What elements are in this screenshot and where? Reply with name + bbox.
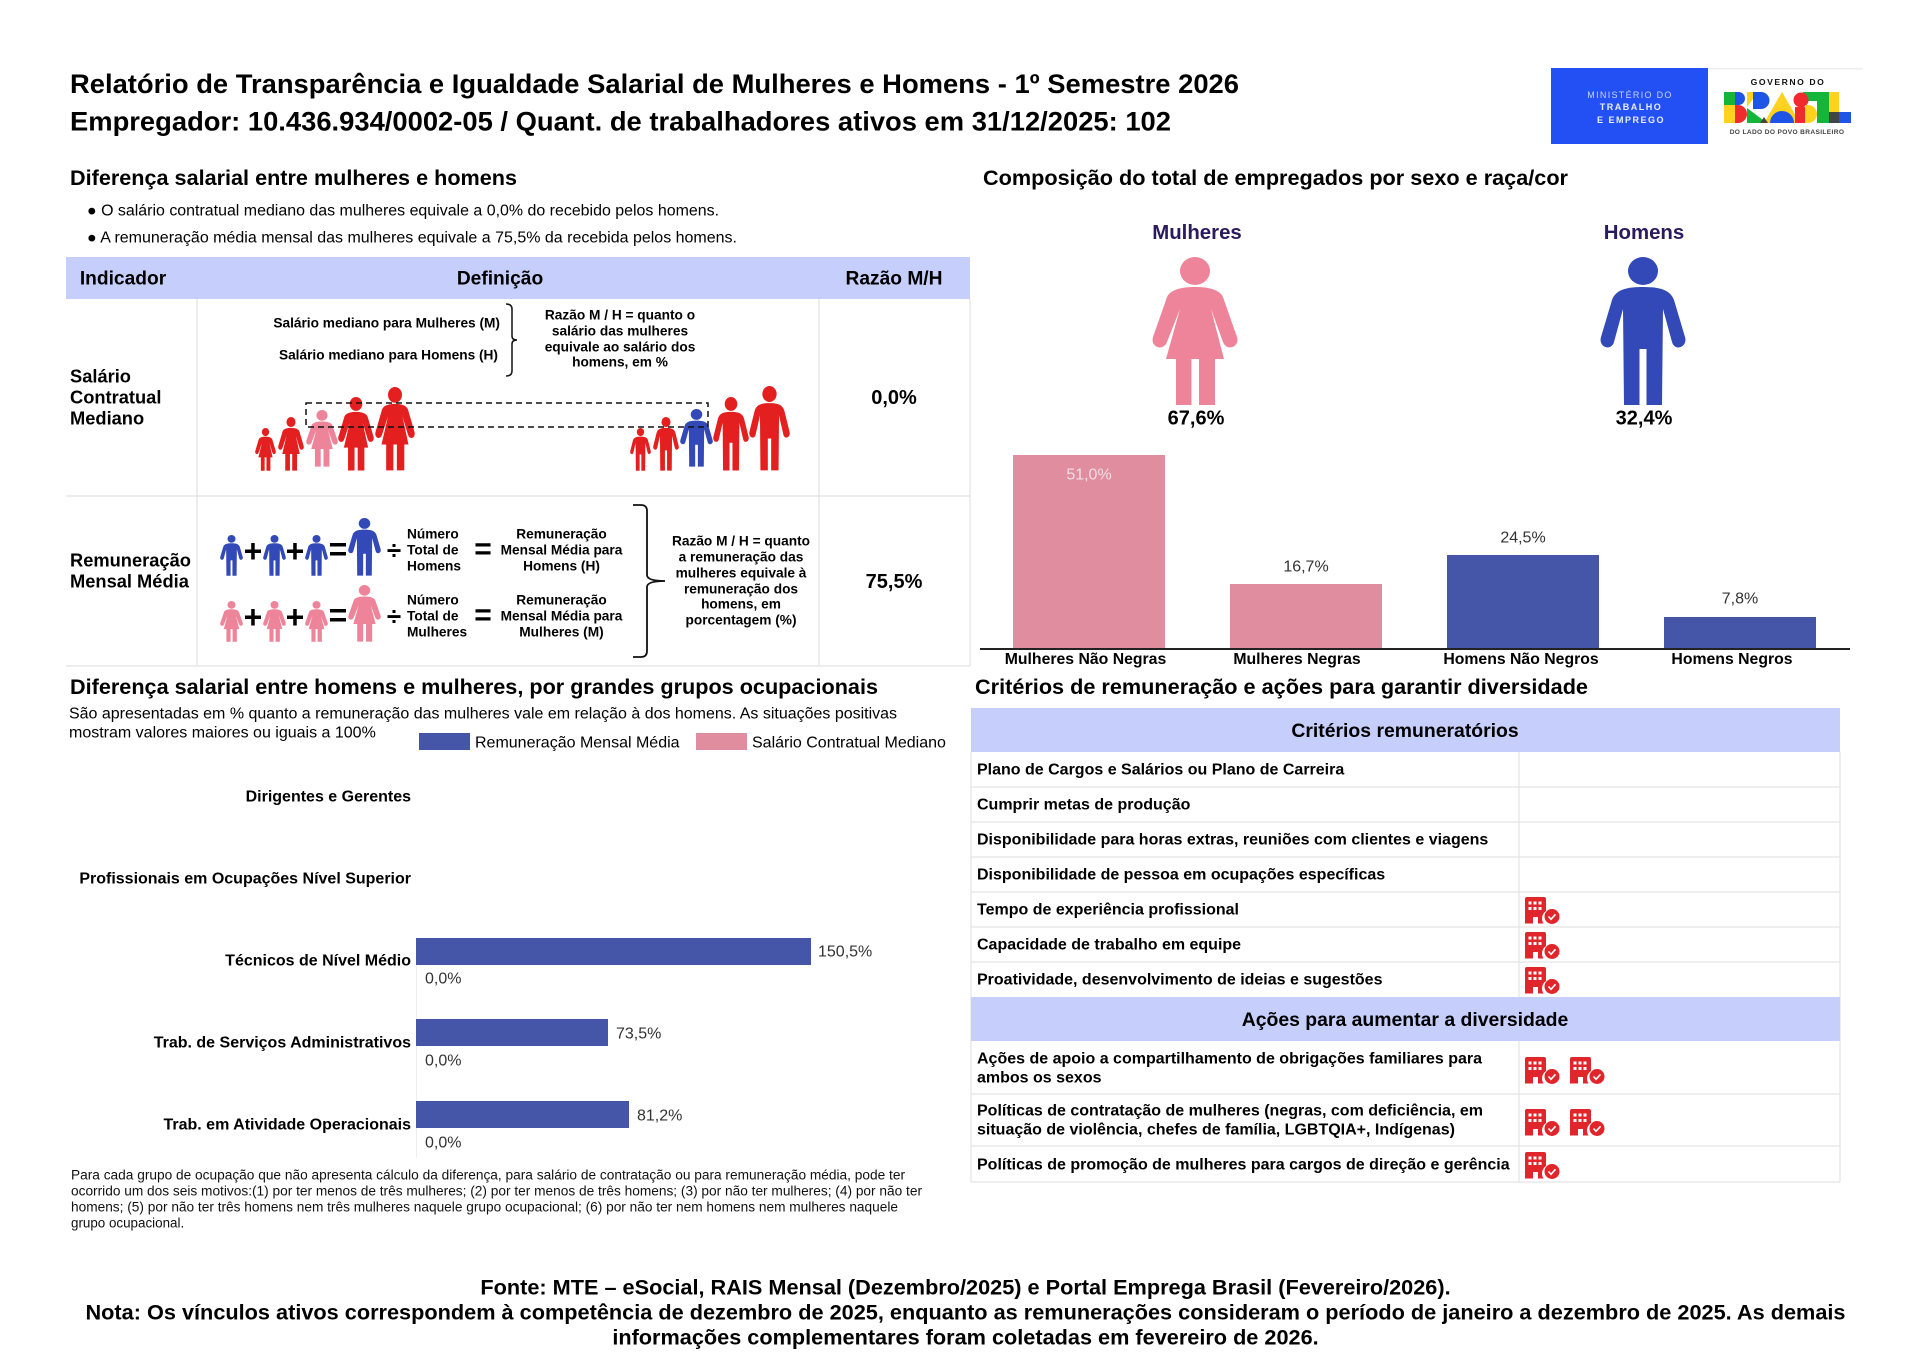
panel: critérios remuneratórios [971, 708, 1840, 1182]
title: Relatório de Transparência e Igualdade Salarial de Mulheres e Homens - 1º Semestre 2026 [70, 69, 1239, 99]
legend: Salário Contratual Mediano [752, 734, 946, 752]
bullet list: ● O salário contratual mediano das mulheres equivale a 0,0% do recebido pelos homens. [87, 202, 719, 220]
row: salário contratual mediano: Salário [70, 366, 131, 386]
panel: ações para aumentar a diversidade: situação de violência, chefes de família, LGBTQIA+, Indígenas) [977, 1122, 1455, 1138]
footer: fonte e nota: informações complementares foram coletadas em fevereiro de 2026. [612, 1324, 1319, 1350]
footer: fonte e nota: Fonte: MTE – eSocial, RAIS Mensal (Dezembro/2025) e Portal Emprega Brasil (Fevereiro/2026). [480, 1274, 1451, 1300]
row: remuneração mensal média: porcentagem (%) [685, 612, 797, 628]
figures: homens fórmula: Mensal Média para [501, 542, 623, 558]
icon: empresa [1525, 967, 1560, 994]
icon: empresa [1525, 932, 1560, 959]
logo: Ministério do Trabalho e Emprego, Governo do Brasil: E EMPREGO [1597, 115, 1665, 125]
row: salário contratual mediano: Salário mediano para Mulheres (M) [273, 316, 500, 330]
row: remuneração mensal média: a remuneração das [679, 550, 804, 564]
bar chart: composição: Mulheres Não Negras [1005, 651, 1166, 668]
bullet list [87, 202, 737, 246]
row: salário contratual mediano: Razão M / H = quanto o [545, 308, 695, 322]
row: remuneração mensal média: Remuneração [70, 550, 191, 570]
row: salário contratual mediano: salário das mulheres [552, 324, 688, 338]
figures: mulheres fórmula: Mensal Média para [501, 608, 623, 624]
figures: homens fórmula: Remuneração [516, 526, 607, 542]
header: Ações para aumentar a diversidade [1242, 1009, 1568, 1031]
figures: homens fórmula: + [244, 533, 262, 569]
heading: diferença por grupos ocupacionais: Diferença salarial entre homens e mulheres, por grandes grupos ocupacionais [70, 675, 878, 699]
text block: explicação: São apresentadas em % quanto a remuneração das mulheres vale em relação à dos homens. As situações positivas [69, 706, 897, 722]
text block: nota ocupações: ocorrido um dos seis motivos:(1) por ter menos de três mulheres; (2) por ter menos de três homens; (3) por não ter mulheres; (4) por não ter [71, 1184, 923, 1198]
bar chart: grupos ocupacionais: Técnicos de Nível Médio [225, 952, 411, 970]
logo: Ministério do Trabalho e Emprego, Governo do Brasil [1551, 68, 1863, 144]
bar chart: composição: 51,0% [1066, 466, 1112, 484]
figures: homens fórmula: Homens (H) [523, 558, 600, 574]
row: remuneração mensal média [70, 505, 923, 657]
figures: mulheres fórmula: Mulheres [407, 624, 467, 640]
panel: critérios remuneratórios: Disponibilidade para horas extras, reuniões com clientes e viagens [977, 832, 1488, 848]
row: salário contratual mediano: Contratual [70, 386, 161, 408]
figures: homens [630, 386, 790, 471]
figures: mulheres fórmula [220, 585, 623, 642]
table header: Razão M/H [845, 268, 943, 290]
row: salário contratual mediano: 0,0% [871, 387, 917, 409]
bar chart: composição: Mulheres Negras [1233, 651, 1361, 668]
icon: homem [1601, 257, 1685, 405]
row: salário contratual mediano: Salário mediano para Homens (H) [279, 348, 498, 362]
figures: mulheres fórmula: + [286, 599, 304, 635]
figures: mulheres fórmula: = [329, 597, 347, 633]
panel: mulheres [1152, 222, 1242, 430]
panel: mulheres: Mulheres [1152, 222, 1242, 244]
text block: nota ocupações: grupo ocupacional. [71, 1216, 184, 1230]
figures: mulheres fórmula: ÷ [387, 601, 401, 631]
figures: homens fórmula: ÷ [387, 535, 401, 565]
bar chart: composição: Homens Negros [1671, 651, 1793, 668]
figures: homens fórmula: + [286, 533, 304, 569]
figures: homens fórmula [220, 518, 623, 576]
bar chart: composição: 24,5% [1500, 530, 1546, 546]
title: Empregador: 10.436.934/0002-05 / Quant. de trabalhadores ativos em 31/12/2025: 102 [70, 106, 1171, 136]
bar chart: composição: 16,7% [1283, 558, 1329, 576]
row: remuneração mensal média: remuneração dos [684, 582, 798, 596]
figures: mulheres fórmula: = [474, 598, 492, 632]
panel: homens: 32,4% [1616, 408, 1673, 430]
heading: critérios: Critérios de remuneração e ações para garantir diversidade [975, 675, 1588, 699]
bar chart: grupos ocupacionais: 81,2% [637, 1108, 682, 1124]
footer: fonte e nota: Nota: Os vínculos ativos correspondem à competência de dezembro de 2025, enquanto as remunerações consideram o período de janeiro a dezembro de 2025. As demais [86, 1300, 1845, 1324]
figures: mulheres fórmula: Remuneração [516, 592, 607, 608]
panel: ações para aumentar a diversidade: ambos os sexos [977, 1070, 1102, 1086]
logo: Ministério do Trabalho e Emprego, Governo do Brasil: TRABALHO [1600, 102, 1662, 112]
figures: homens fórmula: Número [407, 526, 459, 542]
table header [66, 257, 970, 299]
legend: Remuneração Mensal Média [475, 734, 680, 752]
text block: nota ocupações [71, 1168, 923, 1230]
bar chart: composição [980, 455, 1850, 668]
bar chart: composição: 7,8% [1722, 590, 1758, 608]
text block: nota ocupações: homens; (5) por não ter três homens nem três mulheres naquele grupo ocupacional; (6) por não ter nem homens nem mulheres naquele [71, 1200, 898, 1214]
row: remuneração mensal média: 75,5% [866, 571, 923, 593]
panel: critérios remuneratórios: Plano de Cargos e Salários ou Plano de Carreira [977, 762, 1344, 778]
bar chart: grupos ocupacionais: 150,5% [818, 944, 872, 960]
figures: homens fórmula: Total de [407, 542, 459, 558]
figures: homens fórmula: = [474, 532, 492, 566]
bar chart: grupos ocupacionais: 73,5% [616, 1026, 661, 1042]
brace [633, 505, 665, 657]
row: salário contratual mediano [70, 304, 917, 471]
bar chart: grupos ocupacionais: Trab. em Atividade Operacionais [164, 1116, 411, 1134]
header [971, 708, 1840, 752]
panel: mulheres: 67,6% [1168, 408, 1225, 430]
text block: explicação: mostram valores maiores ou iguais a 100% [69, 724, 376, 742]
brace [506, 304, 517, 376]
panel: ações para aumentar a diversidade: Políticas de promoção de mulheres para cargos de direção e gerência [977, 1156, 1510, 1174]
panel: critérios remuneratórios: Tempo de experiência profissional [977, 902, 1239, 918]
row: remuneração mensal média: mulheres equivale à [676, 566, 807, 580]
panel: critérios remuneratórios: Proatividade, desenvolvimento de ideias e sugestões [977, 972, 1383, 988]
header [971, 997, 1840, 1041]
bar chart: composição: Homens Não Negros [1443, 651, 1599, 668]
figures: mulheres fórmula: + [244, 599, 262, 635]
row: remuneração mensal média: homens, em [701, 596, 781, 612]
bullet list: ● A remuneração média mensal das mulheres equivale a 75,5% da recebida pelos homens. [87, 230, 737, 246]
row: salário contratual mediano: Mediano [70, 408, 144, 428]
figures: homens fórmula: Homens [407, 558, 461, 574]
icon: empresa [1525, 897, 1560, 924]
figures: mulheres fórmula: Mulheres (M) [519, 624, 604, 640]
figures: homens fórmula: = [329, 531, 347, 567]
bar chart: grupos ocupacionais [79, 788, 872, 1158]
bar chart: grupos ocupacionais: Dirigentes e Gerentes [246, 788, 411, 806]
heading: composição: Composição do total de empregados por sexo e raça/cor [983, 166, 1569, 190]
heading: diferença salarial: Diferença salarial entre mulheres e homens [70, 166, 517, 190]
panel: critérios remuneratórios: Capacidade de trabalho em equipe [977, 936, 1241, 954]
icon: empresa [1570, 1057, 1604, 1084]
row: remuneração mensal média: Mensal Média [70, 570, 190, 592]
header: Critérios remuneratórios [1291, 720, 1519, 742]
text block: explicação [69, 706, 897, 742]
icon: empresa [1525, 1152, 1560, 1179]
title [70, 69, 1239, 136]
bar chart: grupos ocupacionais: 0,0% [425, 970, 461, 988]
panel: homens: Homens [1604, 222, 1684, 244]
logo: Ministério do Trabalho e Emprego, Governo do Brasil: MINISTÉRIO DO [1587, 90, 1673, 100]
legend [419, 733, 946, 752]
figures: mulheres fórmula: Total de [407, 608, 459, 624]
table header: Definição [457, 268, 543, 290]
icon: empresa [1525, 1109, 1560, 1136]
table header: Indicador [80, 268, 167, 290]
figures: mulheres fórmula: Número [407, 592, 459, 608]
bar chart: grupos ocupacionais: 0,0% [425, 1052, 461, 1070]
bar chart: grupos ocupacionais: Profissionais em Ocupações Nível Superior [79, 870, 411, 888]
panel: ações para aumentar a diversidade [971, 997, 1840, 1179]
logo: Ministério do Trabalho e Emprego, Governo do Brasil: DO LADO DO POVO BRASILEIRO [1730, 129, 1844, 136]
footer: fonte e nota [86, 1274, 1845, 1350]
panel: tabela indicador definição razão [66, 257, 970, 666]
logo: Ministério do Trabalho e Emprego, Governo do Brasil: GOVERNO DO [1751, 77, 1825, 87]
panel: critérios remuneratórios: Cumprir metas de produção [977, 796, 1191, 814]
panel: ações para aumentar a diversidade: Ações de apoio a compartilhamento de obrigações familiares para [977, 1050, 1482, 1068]
bar chart: grupos ocupacionais: Trab. de Serviços Administrativos [154, 1034, 411, 1052]
row: salário contratual mediano: equivale ao salário dos [545, 340, 696, 354]
row: salário contratual mediano: homens, em % [572, 354, 668, 370]
figures: mulheres [255, 387, 415, 471]
text block: nota ocupações: Para cada grupo de ocupação que não apresenta cálculo da diferença, para salário de contratação ou para remuneração média, pode ter [71, 1168, 906, 1182]
icon: mulher [1153, 257, 1237, 405]
icon: empresa [1525, 1057, 1560, 1084]
panel: homens [1601, 222, 1685, 430]
panel: critérios remuneratórios: Disponibilidade de pessoa em ocupações específicas [977, 866, 1385, 884]
icon: empresa [1570, 1109, 1604, 1136]
panel: ações para aumentar a diversidade: Políticas de contratação de mulheres (negras, com deficiência, em [977, 1102, 1483, 1120]
bar chart: grupos ocupacionais: 0,0% [425, 1134, 461, 1152]
row: remuneração mensal média: Razão M / H = quanto [672, 534, 810, 548]
